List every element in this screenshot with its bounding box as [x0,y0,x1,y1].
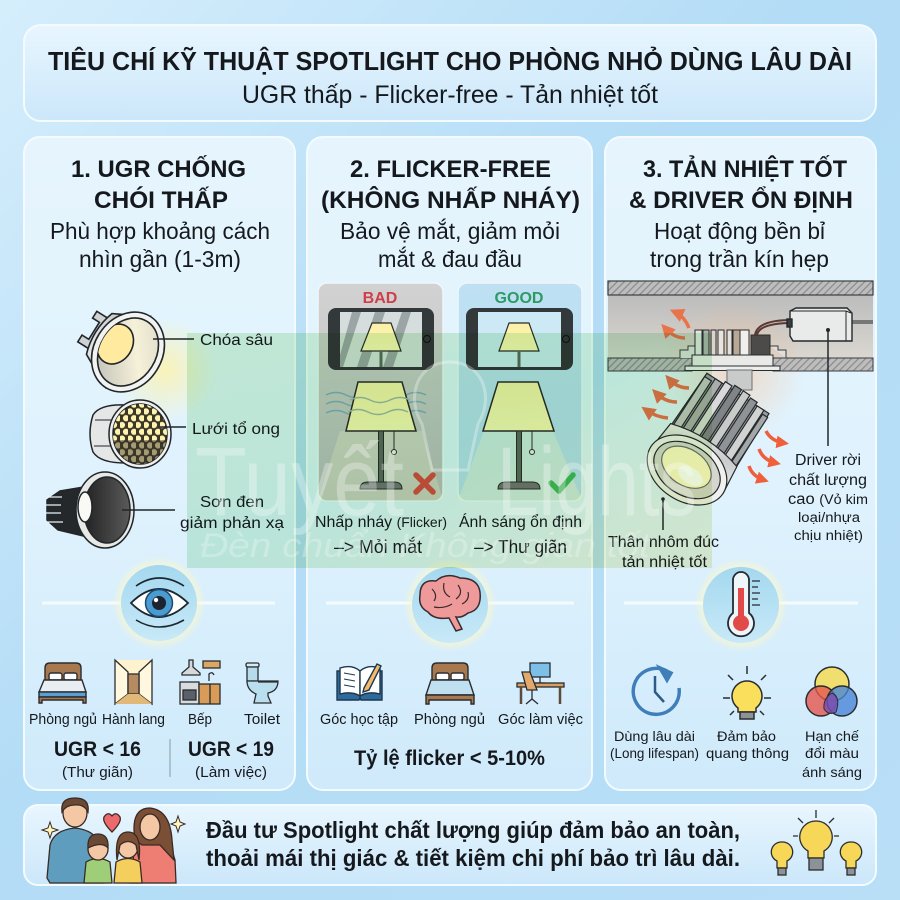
icon: open book [337,664,382,700]
comparison: GOOD: GOOD [495,290,543,307]
callout: external driver: Driver rời [795,452,861,469]
spec: UGR under 19 [188,738,274,781]
panel 3 description [650,218,829,272]
phone steady [466,308,573,370]
panel 1 description: nhìn gần (1-3m) [79,246,241,272]
diagram: ceiling and driver [608,281,873,440]
icon: brain [403,558,497,652]
callout: Chóa sâu [153,332,273,349]
panel 1 heading: CHÓI THẤP [94,186,228,214]
caption: flicker [315,514,447,557]
panel 2 description [340,218,560,272]
watermark: Tuyết Light: Lights [497,427,697,536]
room labels panel 2: Phòng ngủ [414,711,485,728]
room labels panel 1: Phòng ngủ [29,711,97,728]
divider [624,602,858,604]
comparison: GOOD [458,283,582,501]
benefit labels: Đảm bảo [717,728,776,744]
panel 3 heading [629,154,853,214]
caption: flicker: –> Mỏi mắt [334,536,422,557]
icon: clock [633,668,679,714]
icon: deep reflector downlight [76,310,210,416]
watermark: Tuyết Light: Tuyết [195,427,404,536]
icon: red cross [416,475,433,492]
icon: three bulbs [771,810,862,875]
benefit labels: Hạn chế [805,728,859,744]
benefit labels: quang thông [706,745,789,761]
divider [326,602,574,604]
panel 1 heading: 1. UGR CHỐNG [71,155,246,183]
comparison: BAD [318,283,443,501]
icon: green check [551,475,573,491]
icon: bulb [723,666,771,719]
spec: UGR under 16: UGR < 16 [54,738,141,761]
callout: external driver [788,328,868,543]
panel 2 description: mắt & đau đầu [378,246,522,272]
room labels panel 2: Góc học tập [320,711,398,728]
panel 3 heading: & DRIVER ỔN ĐỊNH [629,186,853,214]
room labels panel 1 [29,711,281,728]
benefit labels: Dùng lâu dài [614,728,695,744]
spec: UGR under 19: (Làm việc) [195,764,267,781]
subtitle: UGR thấp - Flicker-free - Tản nhiệt tốt [242,81,658,109]
panel 2 heading: (KHÔNG NHẤP NHÁY) [321,186,580,214]
icon: bed [39,663,86,703]
LED chassis [685,330,780,370]
callout: external driver: loại/nhựa [798,510,861,525]
lamp flickering [318,382,443,500]
panel: thermal [605,137,876,790]
callout: die-cast body [608,497,719,571]
caption: flicker: Nhấp nháy (Flicker) [315,514,447,531]
icon: thermometer [694,558,788,652]
callout: die-cast body: tản nhiệt tốt [622,554,708,571]
footer banner [24,798,876,885]
spec: UGR under 16: (Thư giãn) [62,764,133,781]
benefit labels: ánh sáng [802,764,862,780]
room labels panel 1: Toilet [244,711,281,728]
icon: family [42,798,185,883]
icon: black painted downlight [45,472,134,548]
panel 1 description [50,218,270,272]
spec: UGR under 19: UGR < 19 [188,738,274,761]
title: TIÊU CHÍ KỸ THUẬT SPOTLIGHT CHO PHÒNG NHỎ DÙNG LÂU DÀI [48,45,852,76]
room labels panel 2 [320,711,583,728]
icon: hallway [115,660,152,704]
footer message: thoải mái thị giác & tiết kiệm chi phí bảo trì lâu dài. [206,845,740,871]
callout: die-cast body: Thân nhôm đúc [608,534,719,551]
panel 2 heading: 2. FLICKER-FREE [350,156,551,183]
panel: UGR [24,137,295,790]
callout: Sơn đen giảm phản xạ: giảm phản xạ [180,515,284,532]
icon: bed [426,663,474,704]
benefit labels [610,728,862,780]
panel 2 heading [321,156,580,214]
icon: colour circles [806,667,857,716]
callout: external driver: chịu nhiệt) [794,528,863,543]
caption: stable light: Ánh sáng ổn định [459,512,582,531]
spec: flicker rate: Tỷ lệ flicker < 5-10% [354,747,545,770]
icon: eye [112,556,206,650]
caption: stable light [459,512,582,557]
panel 2 description: Bảo vệ mắt, giảm mỏi [340,218,560,244]
room labels panel 1: Hành lang [102,711,165,728]
callout: Lưới tổ ong: Lưới tổ ong [192,420,280,438]
fins [665,368,773,476]
panel 1 heading [71,155,246,214]
watermark: Tuyết Light [187,333,712,568]
callout: Sơn đen giảm phản xạ [122,494,284,532]
caption: stable light: –> Thư giãn [474,537,567,557]
room labels panel 1: Bếp [188,711,212,728]
driver box [787,308,873,341]
callout: Chóa sâu: Chóa sâu [200,332,273,349]
diagram: aluminium spotlight [634,365,776,519]
footer message [206,817,740,871]
callout: external driver: chất lượng [789,472,867,489]
panel 3 description: trong trần kín hẹp [650,246,829,272]
callout: Lưới tổ ong [160,420,280,438]
icon: kitchen [180,660,220,704]
phone with stripes [328,308,434,370]
icon: desk [517,663,564,704]
benefit labels: đổi màu [805,745,859,761]
callout: external driver: cao (Vỏ kim [788,491,868,508]
heat arrows [646,312,784,480]
lamp steady [458,382,582,500]
panel 1 description: Phù hợp khoảng cách [50,218,270,244]
divider [42,602,275,604]
footer message: Đầu tư Spotlight chất lượng giúp đảm bảo an toàn, [206,817,740,843]
watermark: Tuyết Light: Đèn chuẩn Không gian tốt [200,527,652,565]
icon: honeycomb downlight [90,400,171,468]
icon: toilet [246,663,278,703]
room labels panel 2: Góc làm việc [498,711,583,728]
panel 3 heading: 3. TẢN NHIỆT TỐT [643,154,847,183]
panel 3 description: Hoạt động bền bỉ [654,218,825,244]
callout: Sơn đen giảm phản xạ: Sơn đen [200,494,264,511]
header card [24,25,876,121]
comparison: BAD: BAD [363,290,397,307]
benefit labels: (Long lifespan) [610,745,699,761]
spec: UGR under 16 [54,738,141,781]
panel: Flicker-free [307,137,592,790]
